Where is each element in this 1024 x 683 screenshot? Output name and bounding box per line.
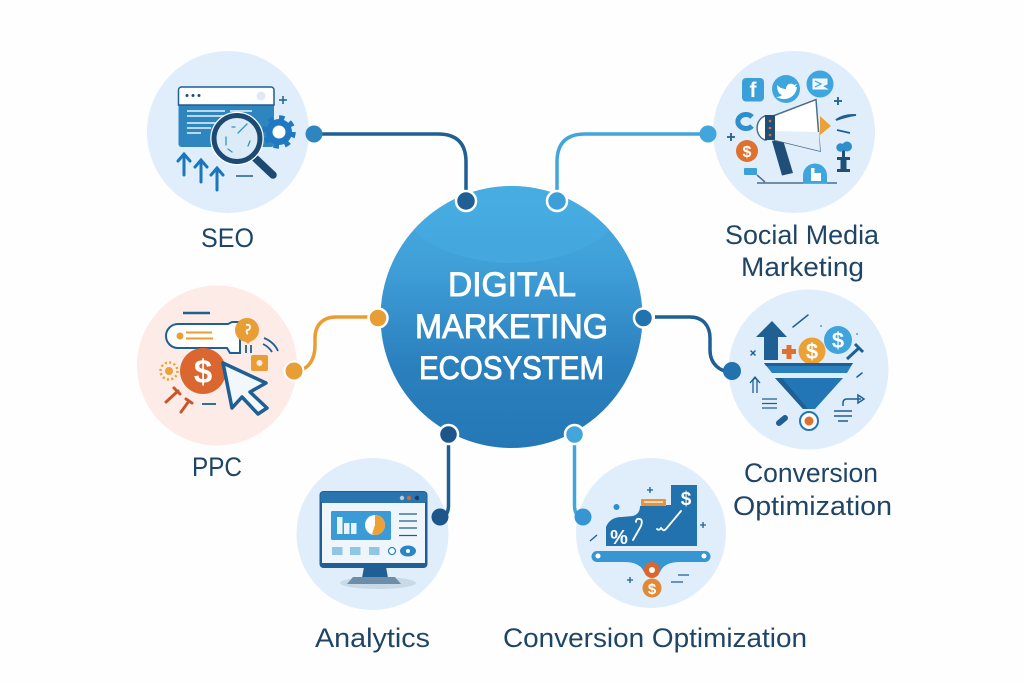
icon: location pin [235,318,259,353]
icon: funnel bar [592,551,710,572]
icon: sun [160,362,178,380]
icon: magnifier [214,116,273,175]
hub title: MARKETING [415,308,608,346]
tiles [332,547,380,555]
sparkle marks [590,487,706,583]
hub title: ECOSYSTEM [419,350,604,386]
connector: PPC [294,317,378,371]
icon: orange coin: $ [806,339,818,364]
hub node: Social [547,191,567,211]
icon: orange coin [798,338,826,364]
sparkle marks [236,96,287,176]
hub node: Analytics [439,425,458,444]
icon: dollar coin [736,140,758,162]
label: Social Media Marketing [725,220,880,282]
sparkle marks [751,315,862,377]
label: Social Media Marketing: Marketing [741,252,864,282]
icon: monitor stand [347,567,401,584]
icon: stepped chart [606,485,697,546]
icon: dollar circle [180,348,226,394]
label: SEO: SEO [201,223,254,253]
label: Conversion Optimization: Conversion Optimization [503,623,807,653]
icon: dollar circle: $ [194,353,212,390]
icon: facebook: f [750,79,758,102]
wave marks [263,338,278,352]
icon: gear [264,118,294,146]
icon: target [800,412,818,430]
connector dot: Conversion right [723,362,741,380]
icon: monitor shadow [340,577,416,589]
icon: orange ring [644,562,660,578]
panel: Conversion Optimization right [728,290,892,521]
icon: dollar coin [642,578,662,598]
icon: like dome [803,164,827,184]
icon: nail [847,344,863,359]
controls [388,546,416,556]
hub node: Conversion bottom [565,425,584,444]
icon: message badge [806,70,834,98]
label: Conversion Optimization: Optimization [733,491,892,521]
connector dot: PPC [284,362,304,380]
icon: search pill [166,322,240,353]
dash [202,403,216,405]
connector: Social Media Marketing [557,134,708,201]
icon: chat bubble and base line [744,168,837,183]
bar chart [337,517,356,534]
pie chart [365,515,385,535]
icon: blue coin: $ [832,328,844,353]
small marks left [750,377,777,408]
label: Conversion Optimization [733,458,892,521]
panel: Social Media Marketing [713,51,880,282]
icon: chart symbols: % [610,527,628,549]
icon: orange tab [641,499,666,506]
small blob [779,418,785,423]
connector: Analytics [440,434,448,517]
icon: funnel [764,363,853,409]
connector dot: SEO [306,126,322,142]
icon: chart symbols: $ [681,489,692,510]
icon: up arrow [756,321,787,360]
label: Conversion Optimization: Conversion [744,458,878,488]
icon: plus [782,345,796,359]
icon: megaphone [757,100,831,176]
label: PPC: PPC [192,452,242,482]
hub node: Conversion right [634,308,653,328]
icon: orange ticket [251,355,268,371]
panel: Conversion Optimization bottom [503,458,807,653]
connector dot: Social [700,126,716,142]
label: Analytics: Analytics [315,623,430,653]
icon: dollar coin: $ [648,581,657,598]
icon: facebook [742,78,764,102]
connector: Conversion Optimization right [655,317,732,372]
icon: browser window [178,87,274,147]
icon: blue coin [824,326,852,354]
icon: cursor [223,363,267,414]
dash [183,312,210,314]
central hub [380,186,642,448]
icon: chart symbols [610,489,692,549]
hub title [415,266,608,386]
connector: SEO [314,134,466,201]
hub node: SEO [456,191,476,211]
sound marks [727,97,856,141]
icon: nails [166,388,192,412]
icon: monitor [320,491,428,568]
connector dot: Analytics [432,508,448,526]
connector: Conversion Optimization bottom [574,434,583,517]
icon: dollar coin: $ [743,144,752,161]
icon: growth arrows [178,154,223,190]
icon: twitter [772,75,800,103]
label: Social Media Marketing: Social Media [725,220,880,250]
text lines [399,514,417,536]
icon: pedestal plant [836,142,852,172]
connector dot: Conversion bottom [574,508,592,526]
panel: SEO [147,51,309,253]
hub node: PPC [368,308,388,328]
panel: Analytics [296,458,448,653]
panel: PPC [137,286,297,482]
dot [614,504,620,510]
hub title: DIGITAL [448,266,576,304]
dashboard panel [331,511,391,540]
small marks right [834,395,864,421]
icon: magnet [738,115,752,128]
